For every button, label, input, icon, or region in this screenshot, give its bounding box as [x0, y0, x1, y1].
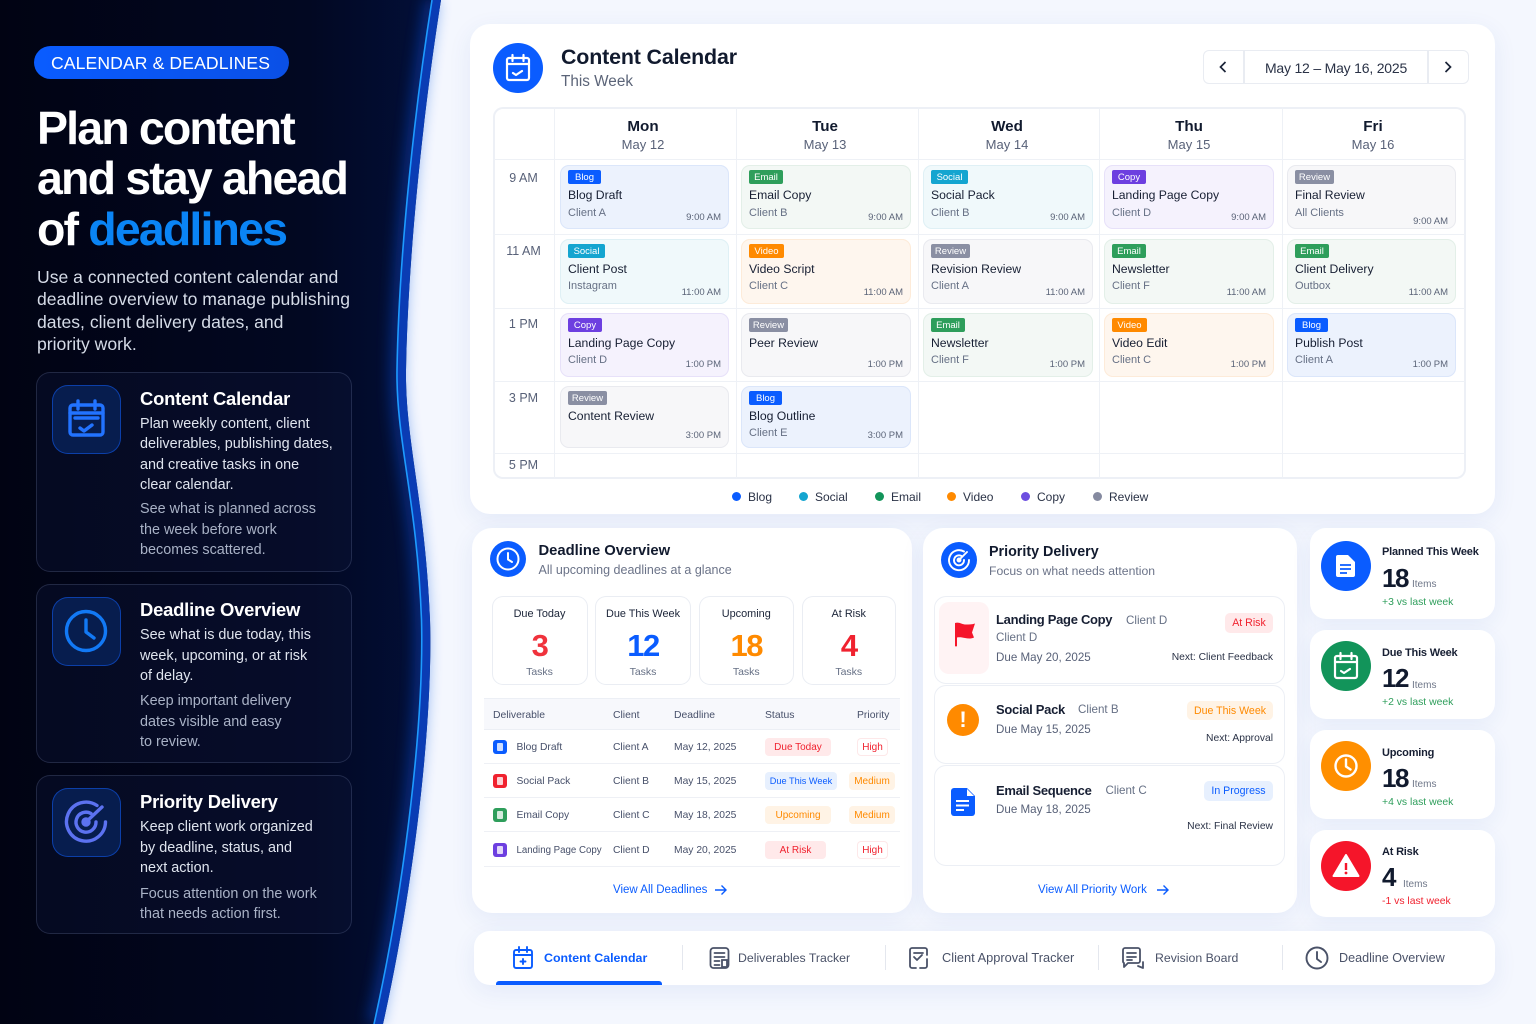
legend: Video [947, 490, 993, 504]
row: Social Pack: Social Pack [516, 776, 570, 787]
event: Publish Post: Client A [1295, 354, 1333, 366]
description: by deadline, status, and [140, 840, 292, 856]
intro paragraph: dates, client delivery dates, and [37, 312, 283, 332]
event: Email Copy: Client B [749, 207, 788, 219]
description: the week before work [140, 522, 277, 538]
event: Client Delivery: 11:00 AM [1409, 287, 1448, 298]
icon: target [52, 788, 121, 857]
table header [484, 698, 900, 730]
event: Social Pack: 9:00 AM [1050, 212, 1085, 223]
heading: Priority Delivery [989, 544, 1099, 560]
event: Landing Page Copy: Copy [1118, 172, 1140, 183]
event: Blog Draft [560, 165, 729, 229]
event: Client Post: Social [574, 246, 599, 257]
kpi: planned this week: Planned This Week [1382, 546, 1479, 558]
legend: Email: Email [891, 490, 921, 504]
priority item: Landing Page Copy: Client D [996, 631, 1037, 644]
icon: calendar badge [493, 43, 543, 93]
priority item: Social Pack: Social Pack [996, 702, 1065, 716]
event: Video Script: Client C [749, 280, 788, 292]
stat: at risk: 4 [841, 628, 857, 663]
heading: Deadline Overview [140, 599, 300, 620]
time label: 1 PM: 1 PM [509, 317, 538, 331]
description: that needs action first. [140, 906, 281, 922]
day header: Mon: May 12 [622, 137, 664, 152]
legend: Video: Video [963, 490, 993, 504]
event: Video Edit [1104, 313, 1274, 377]
description [140, 416, 333, 558]
event: Landing Page Copy: Client D [1112, 207, 1151, 219]
row: Social Pack: Medium [854, 776, 890, 787]
panel: content calendar feature [36, 372, 352, 572]
kpi: planned this week: 18 [1382, 563, 1408, 593]
kpi: at risk: At Risk [1382, 846, 1418, 858]
event: Publish Post: Blog [1302, 320, 1321, 331]
description: becomes scattered. [140, 542, 266, 558]
heading: Priority Delivery [140, 791, 278, 812]
priority item: Landing Page Copy: At Risk [1232, 617, 1266, 629]
event: Revision Review: Review [935, 246, 966, 257]
icon: alert [1321, 841, 1371, 891]
icon: clock [52, 597, 121, 666]
day header: Tue: May 13 [804, 137, 846, 152]
date range [1244, 50, 1428, 84]
time label: 11 AM: 11 AM [506, 244, 541, 258]
description: clear calendar. [140, 477, 234, 493]
navigation bar [474, 931, 1495, 985]
table header: Status [765, 710, 794, 721]
event: Blog Draft: Blog Draft [568, 188, 622, 202]
intro paragraph [37, 267, 350, 354]
day header: Mon: Mon [627, 118, 659, 135]
heading: Deadline Overview [538, 543, 670, 559]
event: Social Pack [923, 165, 1093, 229]
event: Blog Outline: Blog [756, 393, 775, 404]
date navigation [1203, 50, 1469, 84]
stat: due this week: Tasks [630, 666, 656, 678]
stat: upcoming: Tasks [733, 666, 760, 678]
priority item: Email Sequence: In Progress [1211, 785, 1266, 797]
description: deliverables, publishing dates, [140, 436, 333, 452]
table header: Client [613, 710, 640, 721]
stat: due this week: 12 [627, 628, 659, 663]
kpi: due this week [1310, 630, 1495, 719]
row: Email Copy: May 18, 2025 [674, 810, 736, 821]
event: Video Edit: 1:00 PM [1231, 359, 1266, 370]
row: Email Copy [484, 798, 900, 832]
link: view all deadlines: View All Deadlines [613, 884, 707, 896]
event: Blog Outline: Blog Outline [749, 409, 815, 423]
priority item: Social Pack [934, 685, 1285, 764]
intro paragraph: priority work. [37, 334, 137, 354]
main title: Plan content [37, 102, 294, 154]
kpi: due this week: Due This Week [1382, 647, 1457, 659]
description [140, 627, 311, 750]
event: Email Copy: 9:00 AM [868, 212, 903, 223]
legend: Blog [732, 490, 772, 504]
event: Newsletter: 11:00 AM [1227, 287, 1266, 298]
day header: Tue [804, 118, 846, 152]
description: week, upcoming, or at risk [140, 648, 307, 664]
tab: revision board: Revision Board [1155, 950, 1238, 964]
table header: Deliverable [493, 710, 545, 721]
event: Landing Page Copy: Copy [574, 320, 596, 331]
event: Publish Post: 1:00 PM [1413, 359, 1448, 370]
event: Newsletter: 1:00 PM [1050, 359, 1085, 370]
row: Email Copy: Client C [613, 810, 650, 821]
event: Content Review: Content Review [568, 409, 654, 423]
priority item: Email Sequence: Email Sequence [996, 782, 1092, 798]
event: Client Post: Client Post [568, 262, 627, 276]
event: Video Edit: Client C [1112, 354, 1151, 366]
intro paragraph: deadline overview to manage publishing [37, 289, 350, 309]
stat: upcoming [698, 596, 794, 685]
kpi: upcoming: Items [1412, 779, 1436, 790]
tab: revision board [1122, 947, 1238, 969]
legend: Social: Social [815, 490, 848, 504]
stat: at risk: At Risk [832, 608, 866, 620]
icon: calendar [52, 385, 121, 454]
event: Video Edit: Video Edit [1112, 336, 1167, 350]
icon: target badge [941, 542, 977, 578]
row: Blog Draft: Due Today [774, 742, 822, 753]
legend: Copy [1021, 490, 1065, 504]
day header: Fri: Fri [1363, 118, 1383, 135]
table header: Priority [857, 710, 889, 721]
day header: Wed [986, 118, 1028, 152]
day header: Thu [1168, 118, 1210, 152]
day header: Wed: Wed [991, 118, 1023, 135]
kpi: planned this week [1310, 528, 1495, 619]
legend: Email [875, 490, 921, 504]
event: Publish Post: Publish Post [1295, 336, 1363, 350]
time label: 3 PM: 3 PM [509, 391, 538, 405]
row: Email Copy: Email Copy [516, 810, 569, 821]
event: Client Delivery: Client Delivery [1295, 262, 1374, 276]
tab: deadline overview [1306, 946, 1445, 970]
event: Blog Draft: Client A [568, 207, 606, 219]
event: Landing Page Copy: Landing Page Copy [1112, 188, 1219, 202]
day header: Thu: Thu [1175, 118, 1203, 135]
event: Blog Draft: Blog [575, 172, 594, 183]
subheading: This Week [561, 73, 633, 90]
priority item: Social Pack: Due This Week [1194, 705, 1266, 717]
event: Final Review: Final Review [1295, 188, 1365, 202]
panel: deadline overview feature [36, 584, 352, 763]
event: Blog Outline: 3:00 PM [868, 430, 903, 441]
event: Client Delivery: Email [1300, 246, 1324, 257]
event: Video Script: Video Script [749, 262, 814, 276]
stat: due this week [595, 596, 691, 685]
panel: content calendar [470, 24, 1495, 514]
event: Newsletter: Newsletter [1112, 262, 1170, 276]
kpi: upcoming [1310, 730, 1495, 819]
row: Landing Page Copy: High [862, 845, 883, 856]
icon: previous [1203, 50, 1244, 84]
event: Video Script: Video [754, 246, 779, 257]
description: See what is due today, this [140, 627, 311, 643]
icon: next [1428, 50, 1469, 84]
priority item: Email Sequence: Next: Final Review [1187, 820, 1273, 832]
priority item: Social Pack: Due May 15, 2025 [996, 723, 1091, 736]
kpi: at risk: 4 [1382, 862, 1395, 892]
icon: clock [1321, 741, 1371, 791]
description: of delay. [140, 668, 193, 684]
event: Email Copy [741, 165, 911, 229]
legend: Social [799, 490, 848, 504]
description: Plan weekly content, client [140, 416, 310, 432]
stat: due today [492, 596, 588, 685]
heading: Content Calendar [561, 45, 737, 69]
event: Content Review: Review [572, 393, 603, 404]
event: Landing Page Copy [1104, 165, 1274, 229]
kpi: at risk: Items [1403, 879, 1427, 890]
time label: 9 AM: 9 AM [509, 171, 538, 185]
kpi: upcoming: +4 vs last week [1382, 797, 1453, 808]
row: Social Pack: Due This Week [770, 776, 832, 786]
kpi: at risk [1310, 830, 1495, 917]
event: Newsletter: Client F [931, 354, 969, 366]
priority item: Email Sequence: Client C [1106, 784, 1147, 797]
event: Video Script: 11:00 AM [864, 287, 903, 298]
description: and creative tasks in one [140, 457, 299, 473]
day header: Fri: May 16 [1352, 137, 1394, 152]
row: Email Copy: Upcoming [775, 810, 821, 821]
tab: content calendar (active): Content Calendar [544, 950, 647, 964]
subheading: All upcoming deadlines at a glance [538, 562, 732, 576]
event: Blog Outline: Client E [749, 427, 788, 439]
event: Peer Review: Peer Review [749, 336, 818, 350]
kpi: due this week: Items [1412, 680, 1436, 691]
stat: upcoming: 18 [730, 628, 762, 663]
icon: flag [939, 602, 989, 674]
event: Publish Post [1287, 313, 1456, 377]
time label: 5 PM: 5 PM [509, 458, 538, 472]
priority item: Email Sequence [934, 765, 1285, 866]
event: Newsletter [1104, 239, 1274, 304]
event: Client Delivery [1287, 239, 1456, 304]
tab: deliverables tracker [710, 947, 850, 969]
description: Focus attention on the work [140, 886, 317, 902]
event: Landing Page Copy: Client D [568, 354, 607, 366]
row: Landing Page Copy: At Risk [780, 845, 811, 856]
row: Blog Draft: Blog Draft [516, 742, 562, 753]
subheading: Focus on what needs attention [989, 564, 1155, 578]
panel: deadline overview [472, 528, 912, 913]
description [140, 819, 317, 922]
priority item: Landing Page Copy [934, 596, 1285, 684]
tab: content calendar (active) [496, 946, 662, 985]
event: Social Pack: Social Pack [931, 188, 995, 202]
stat: at risk: Tasks [835, 666, 862, 678]
legend: Review: Review [1109, 490, 1148, 504]
event: Revision Review: Revision Review [931, 262, 1021, 276]
stat: due today: 3 [532, 628, 547, 663]
event: Email Copy: Email [754, 172, 778, 183]
event: Video Edit: Video [1117, 320, 1142, 331]
event: Landing Page Copy [560, 313, 729, 377]
event: Final Review: 9:00 AM [1413, 216, 1448, 227]
priority item: Social Pack: Next: Approval [1206, 733, 1273, 744]
intro paragraph: Use a connected content calendar and [37, 267, 338, 287]
kpi: upcoming: Upcoming [1382, 747, 1434, 759]
kpi: upcoming: 18 [1382, 763, 1408, 793]
event: Blog Draft: 9:00 AM [686, 212, 721, 223]
day header: Mon [622, 118, 664, 152]
kpi: due this week: +2 vs last week [1382, 697, 1453, 708]
row: Social Pack: Client B [613, 776, 649, 787]
event: Newsletter [923, 313, 1093, 377]
event: Peer Review: 1:00 PM [868, 359, 903, 370]
heading: Content Calendar [140, 388, 290, 409]
event: Revision Review: 11:00 AM [1046, 287, 1085, 298]
icon: warning: ! [959, 707, 967, 732]
description: See what is planned across [140, 501, 316, 517]
table: deliverables [484, 698, 900, 867]
event: Blog Outline [741, 386, 911, 448]
legend [732, 490, 1148, 504]
event: Video Script [741, 239, 911, 304]
legend: Copy: Copy [1037, 490, 1065, 504]
icon: document [951, 788, 975, 816]
kpi: at risk: -1 vs last week [1382, 896, 1451, 907]
kpi: planned this week: Items [1412, 579, 1436, 590]
event: Revision Review: Client A [931, 280, 969, 292]
event: Social Pack: Social [937, 172, 962, 183]
priority item: Landing Page Copy: Landing Page Copy [996, 612, 1112, 626]
kpi: planned this week: +3 vs last week [1382, 597, 1453, 608]
row: Social Pack: May 15, 2025 [674, 776, 736, 787]
table header: Deadline [674, 710, 715, 721]
event: Client Post: 11:00 AM [682, 287, 721, 298]
event: Final Review: All Clients [1295, 207, 1344, 219]
event: Content Review: 3:00 PM [686, 430, 721, 441]
category badge [34, 46, 289, 79]
tab: deliverables tracker: Deliverables Tracker [738, 950, 850, 964]
calendar grid [493, 107, 1466, 479]
stat: due this week: Due This Week [606, 608, 680, 620]
description: dates visible and easy [140, 714, 282, 730]
priority item: Landing Page Copy: Due May 20, 2025 [996, 651, 1091, 664]
row: Email Copy: Medium [854, 810, 890, 821]
event: Revision Review [923, 239, 1093, 304]
stat: upcoming: Upcoming [722, 608, 771, 620]
day header: Wed: May 14 [986, 137, 1028, 152]
event: Landing Page Copy: 9:00 AM [1231, 212, 1266, 223]
description: to review. [140, 734, 201, 750]
description: Keep important delivery [140, 693, 291, 709]
priority item: Landing Page Copy: Client D [1126, 614, 1167, 627]
tab: deadline overview: Deadline Overview [1339, 950, 1445, 964]
tab: client approval tracker: Client Approval Tracker [942, 950, 1074, 964]
priority item: Email Sequence: Due May 18, 2025 [996, 803, 1091, 816]
day header: Fri [1352, 118, 1394, 152]
priority item: Landing Page Copy: Next: Client Feedback [1172, 652, 1273, 663]
icon: document [1321, 541, 1371, 591]
event: Client Post [560, 239, 729, 304]
event: Email Copy: Email Copy [749, 188, 811, 202]
event: Client Delivery: Outbox [1295, 280, 1330, 292]
event: Content Review [560, 386, 729, 448]
main title: of deadlines [37, 203, 286, 255]
event: Peer Review [741, 313, 911, 377]
row: Landing Page Copy: May 20, 2025 [674, 845, 736, 856]
category badge: CALENDAR & DEADLINES [51, 53, 270, 73]
event: Landing Page Copy: Landing Page Copy [568, 336, 675, 350]
icon: warning [947, 704, 979, 736]
tab: client approval tracker [909, 947, 1074, 969]
date range: May 12 – May 16, 2025 [1265, 60, 1407, 76]
day header: Tue: Tue [812, 118, 838, 135]
row: Blog Draft: Client A [613, 742, 648, 753]
event: Newsletter: Email [936, 320, 960, 331]
kpi: due this week: 12 [1382, 663, 1408, 693]
stat: due today: Due Today [514, 608, 565, 620]
stat: at risk [802, 596, 896, 685]
event: Final Review [1287, 165, 1456, 229]
main title: and stay ahead [37, 152, 347, 204]
event: Newsletter: Newsletter [931, 336, 989, 350]
row: Social Pack [484, 764, 900, 798]
row: Landing Page Copy: Client D [613, 845, 650, 856]
event: Newsletter: Email [1117, 246, 1141, 257]
event: Landing Page Copy: 1:00 PM [686, 359, 721, 370]
description: next action. [140, 860, 214, 876]
row: Landing Page Copy: Landing Page Copy [516, 845, 602, 856]
priority item: Social Pack: Client B [1078, 703, 1119, 716]
event: Client Post: Instagram [568, 280, 617, 292]
event: Peer Review: Review [753, 320, 784, 331]
row: Landing Page Copy [484, 833, 900, 867]
event: Newsletter: Client F [1112, 280, 1150, 292]
icon: calendar [1321, 641, 1371, 691]
row: Blog Draft: High [862, 742, 883, 753]
main title [37, 102, 347, 255]
row: Blog Draft: May 12, 2025 [674, 742, 736, 753]
stat: due today: Tasks [526, 666, 553, 678]
panel: priority delivery [923, 528, 1297, 913]
link: view all priority work: View All Priority Work [1038, 884, 1147, 896]
legend: Blog: Blog [748, 490, 772, 504]
row: Blog Draft [484, 730, 900, 764]
event: Final Review: Review [1299, 172, 1330, 183]
event: Social Pack: Client B [931, 207, 970, 219]
panel: priority delivery feature [36, 775, 352, 934]
icon: clock badge [490, 541, 526, 577]
description: Keep client work organized [140, 819, 313, 835]
day header: Thu: May 15 [1168, 137, 1210, 152]
